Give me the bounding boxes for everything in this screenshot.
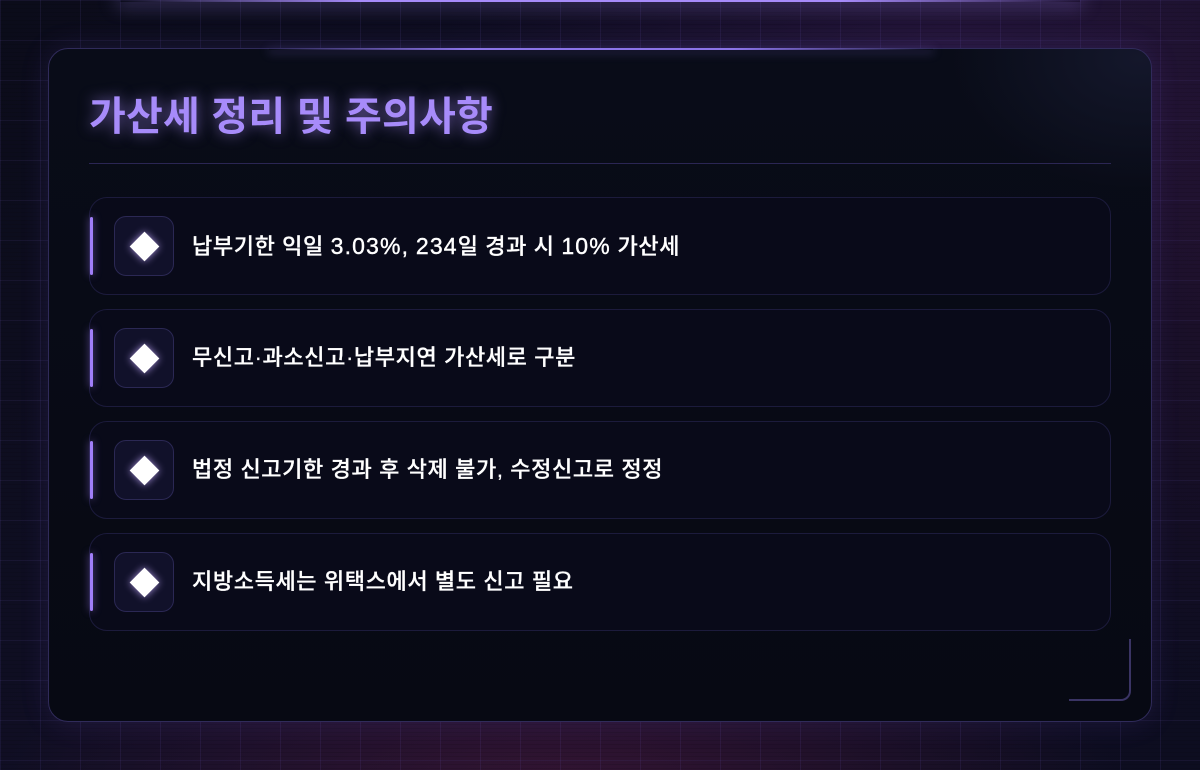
item text: 지방소득세는 위택스에서 별도 신고 필요 bbox=[192, 569, 574, 594]
icon: diamond bbox=[114, 216, 174, 276]
corner bracket bbox=[1069, 639, 1131, 701]
title: 가산세 정리 및 주의사항 bbox=[89, 95, 493, 139]
item text: 무신고·과소신고·납부지연 가산세로 구분 bbox=[192, 345, 576, 370]
list item 2 bbox=[89, 309, 1111, 407]
icon: diamond bbox=[114, 328, 174, 388]
list item 4 bbox=[89, 533, 1111, 631]
icon: diamond bbox=[114, 552, 174, 612]
list item 1 bbox=[89, 197, 1111, 295]
item text: 납부기한 익일 3.03%, 234일 경과 시 10% 가산세 bbox=[192, 233, 680, 259]
icon: diamond bbox=[114, 440, 174, 500]
top glow bar bbox=[120, 0, 1080, 2]
list item 3 bbox=[89, 421, 1111, 519]
item text: 법정 신고기한 경과 후 삭제 불가, 수정신고로 정정 bbox=[192, 457, 663, 482]
